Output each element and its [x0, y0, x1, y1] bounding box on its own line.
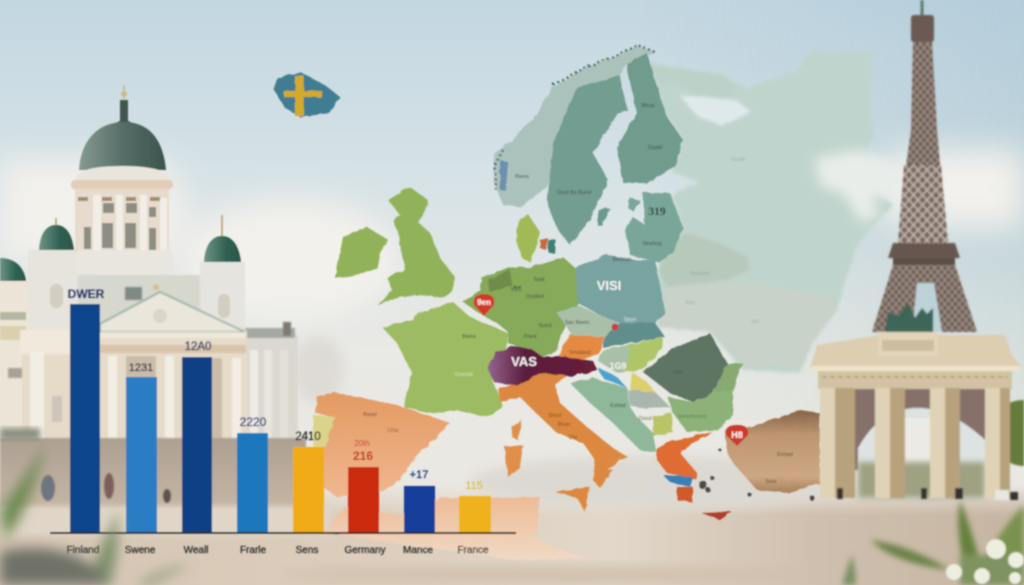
Portugal: [313, 415, 335, 447]
Macedonia: [653, 413, 673, 437]
Iceland flag: [274, 72, 340, 117]
Germany: [463, 257, 580, 357]
small country labels: Sss: [685, 300, 695, 306]
small country labels: Iss: [751, 319, 759, 325]
main body: [78, 275, 200, 325]
lower tower arch behind gate: [855, 388, 985, 470]
Ireland: [335, 227, 388, 278]
Bulgaria: [668, 390, 733, 432]
axis line: [50, 532, 516, 534]
Hungary value: 1G9: [609, 361, 627, 371]
small country labels: Saal: [533, 277, 545, 283]
bar 1: DWER: [68, 287, 105, 301]
small country labels: Dis: [569, 435, 577, 441]
plant foreground left: [0, 445, 190, 585]
Slovakia pin: [612, 324, 618, 330]
left tower: [28, 218, 78, 330]
main body window: [125, 287, 142, 300]
left wing: [0, 281, 30, 441]
small country labels: Bwea: [462, 334, 477, 340]
Belgium pin: 9en: [477, 298, 491, 307]
small country labels: Bwad: [363, 412, 377, 418]
small country labels: South: [731, 157, 745, 163]
Kosovo region: [628, 390, 670, 408]
central dome and drum: [71, 85, 174, 278]
bar 1: Finland: [67, 545, 99, 556]
bar 8: [457, 480, 491, 556]
bar 4: 2220: [240, 415, 267, 429]
France: [382, 302, 508, 417]
bar chart: [50, 287, 516, 556]
white flowers: [946, 539, 1024, 584]
bar 2: Swene: [125, 545, 156, 556]
right tower: [200, 215, 245, 332]
Denmark: [516, 214, 540, 262]
small country labels: Ouided: [526, 294, 544, 300]
bar 7: Mance: [403, 545, 433, 556]
small country labels: Smaland: [569, 350, 591, 356]
Italy: [498, 370, 628, 488]
small country labels: Ssowen: [690, 271, 710, 277]
bar 6: 216: [353, 449, 373, 463]
Austria: [558, 335, 605, 362]
bar 7: [403, 469, 435, 556]
Poland value: VISI: [597, 278, 621, 293]
map labels: [363, 103, 793, 485]
northern coast speckle: [495, 45, 655, 190]
stone steps: [0, 428, 330, 536]
small country labels: VBS: [510, 287, 522, 293]
small country labels: Gryd Bs Buird: [557, 190, 591, 196]
small country labels: Fhed: [524, 334, 536, 340]
bar 2: [125, 362, 157, 556]
Gate: [810, 303, 1024, 500]
ground plaza: [0, 336, 1024, 585]
Gotland: [598, 208, 610, 226]
small country labels: Dhla: [387, 428, 400, 434]
small country labels: Sued: [539, 323, 551, 329]
bar 3: 12A0: [185, 341, 211, 353]
bar 7: +17: [410, 469, 428, 481]
people: [41, 473, 171, 503]
small country labels: Sac Bwen: [565, 320, 589, 326]
Sardinia: [505, 445, 523, 477]
bar 3: [182, 341, 212, 556]
Turkey pin: H8: [731, 430, 743, 440]
small country labels: Dqaid: [648, 145, 662, 151]
Moldova: [713, 363, 743, 393]
Sicily: [555, 487, 590, 512]
small country labels: Bhua: [642, 103, 655, 109]
map of Europe: [274, 45, 893, 560]
bar 4: Frarle: [240, 545, 266, 556]
cloud over eastern map: [815, 150, 905, 222]
bar 6: [344, 439, 386, 556]
small country labels: Dsed: [639, 416, 651, 422]
bar 8: France: [457, 545, 489, 556]
small country labels: Strahng: [642, 241, 662, 247]
bar 6: Germany: [344, 545, 386, 556]
Alps region: [487, 347, 597, 386]
Sweden: [547, 75, 627, 245]
Great Britain: [378, 187, 455, 306]
Romania: [643, 333, 727, 402]
columns: [820, 388, 1010, 498]
small country labels: Bwea: [515, 174, 530, 180]
tower legs: [872, 265, 977, 332]
eastern Europe: [647, 50, 893, 373]
Balkans: [570, 378, 657, 453]
portico and pediment: [8, 284, 247, 442]
far left dome: [0, 258, 26, 281]
small country labels: Exbad: [610, 403, 626, 409]
small country labels: Sres: [765, 479, 777, 485]
Saaremaa: [628, 198, 640, 212]
Norway fjord: [500, 160, 508, 190]
Hungary west: [597, 345, 630, 373]
Hungary: [597, 337, 663, 373]
Greece: [657, 432, 713, 480]
small country labels: Exhad: [777, 452, 793, 458]
small country labels: Bwisian: [613, 257, 631, 263]
small country labels: Bwd: [513, 284, 521, 289]
bar 1: [67, 287, 105, 556]
plant foreground right: [842, 500, 1024, 585]
Serbia: [630, 372, 655, 392]
Czechia: [557, 305, 620, 337]
Belgium pin: [474, 294, 494, 316]
small country labels: Bhed: [549, 413, 561, 419]
Spain: [315, 392, 450, 497]
quadriga statue: [885, 303, 933, 332]
small country labels: Spyn: [624, 317, 636, 323]
bar 2: 1231: [129, 362, 153, 374]
bar 5: [293, 431, 324, 556]
right wing: [240, 322, 298, 441]
Slovakia: [603, 323, 665, 348]
small country labels: Grande: [455, 372, 473, 378]
Danish islands: [540, 238, 556, 254]
right sky tint: [806, 0, 1024, 402]
Baltic states: [625, 193, 683, 263]
Baltic value: 319: [648, 206, 666, 218]
bar 5: Sens: [296, 545, 318, 556]
bar 8: 115: [465, 480, 483, 492]
small country labels: [363, 103, 793, 485]
Aegean islands: [699, 448, 814, 500]
clouds: [0, 150, 1024, 320]
Netherlands: [488, 270, 512, 292]
Finland: [617, 53, 683, 183]
bar 5: 2410: [295, 431, 321, 443]
Poland: [575, 255, 665, 323]
Turkey: [725, 410, 820, 493]
Turkey pin: [726, 425, 748, 446]
Eiffel tower: [872, 0, 977, 332]
small country labels: Sdis: [673, 370, 684, 376]
bar 4: [237, 415, 268, 556]
Norway: [493, 45, 657, 207]
attic and cornice: [810, 335, 1022, 368]
right tree: [992, 400, 1024, 466]
Peloponnese: [663, 475, 693, 502]
small country labels: Bhan: [558, 422, 570, 428]
Croatia: [597, 367, 627, 388]
bar 6: 20th: [354, 439, 370, 448]
North Africa: [323, 497, 585, 560]
small country labels: Soewheand: [677, 414, 707, 420]
Alps value: VAS: [511, 354, 537, 369]
bar 3: Weall: [184, 545, 208, 556]
tower arch opening: [912, 283, 942, 332]
Crete: [702, 512, 732, 520]
Corsica: [512, 420, 522, 440]
gate crowd: [837, 488, 1018, 500]
